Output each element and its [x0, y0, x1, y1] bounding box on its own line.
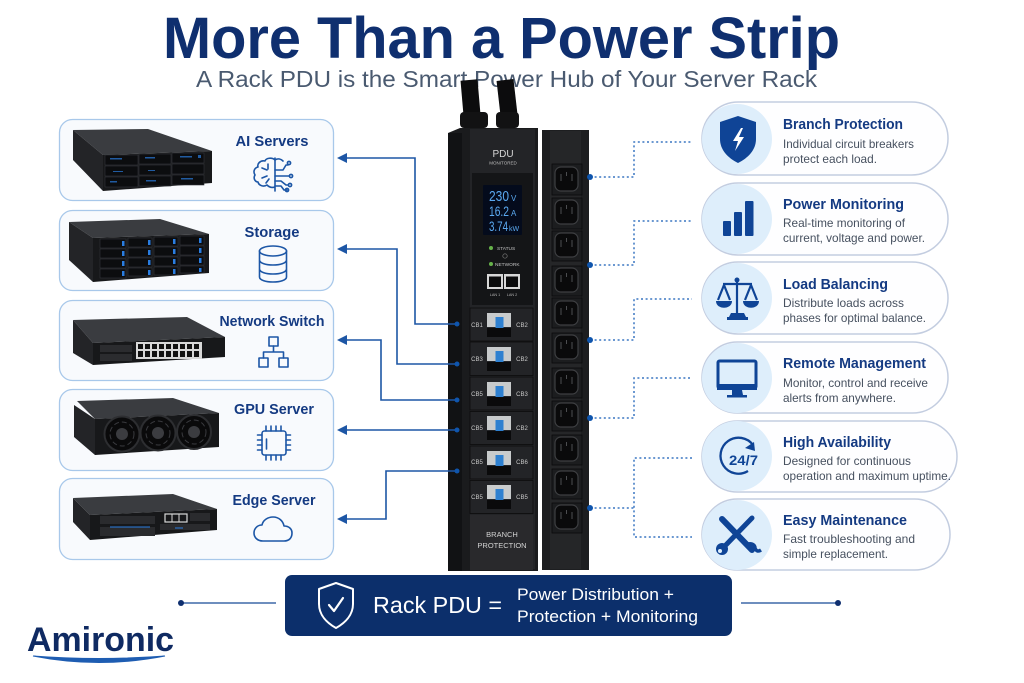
label: AI Servers: AI Servers [236, 133, 308, 150]
branch protection plate [470, 515, 533, 570]
panel: Easy Maintenance [702, 499, 950, 570]
icon: bar chart [723, 201, 754, 236]
label: Edge Server: Edge Server [232, 492, 316, 509]
text: Power Monitoring: Power Monitoring [783, 196, 904, 213]
breaker modules: CB3 [516, 392, 528, 398]
text: Load Balancing [783, 276, 926, 325]
breaker modules: CB5 [516, 495, 528, 501]
LCD display [483, 185, 522, 235]
text: Easy Maintenance: Easy Maintenance [783, 512, 907, 529]
icon: monitor [717, 361, 757, 398]
LCD display: 16.2 [489, 203, 509, 219]
panel: High Availability [702, 421, 957, 492]
banner line right [741, 600, 841, 606]
subtitle: A Rack PDU is the Smart Power Hub of Your Server Rack [196, 66, 818, 92]
text: Easy Maintenance: Fast troubleshooting and [783, 532, 915, 546]
breaker modules: CB2 [516, 323, 528, 329]
text: Power Monitoring: current, voltage and power. [783, 231, 925, 245]
text: High Availability: High Availability [783, 434, 892, 451]
panel: Edge Server [60, 478, 334, 560]
LCD display: V [511, 194, 517, 203]
panel: Storage [60, 210, 334, 290]
label: GPU Server: GPU Server [234, 401, 314, 418]
icon: shield check [319, 583, 353, 628]
text: Rack PDU =: Rack PDU = [373, 592, 502, 618]
text: Branch Protection: Individual circuit breakers [783, 137, 914, 151]
PDU label: PDU [492, 149, 514, 160]
text: equation terms: Protection + Monitoring [517, 608, 698, 626]
text: High Availability: operation and maximum uptime. [783, 469, 951, 483]
icon: chip [258, 426, 290, 460]
text: equation terms [517, 586, 698, 626]
banner: Rack PDU equation [285, 575, 732, 636]
LCD display: kW [509, 226, 520, 233]
text: Power Monitoring: Real-time monitoring of [783, 216, 906, 230]
title: More Than a Power Strip [163, 6, 840, 71]
text: Easy Maintenance [783, 512, 915, 561]
breaker modules: CB5 [471, 460, 483, 466]
logo: Amironic: Amironic [27, 621, 174, 659]
banner line left [178, 600, 276, 606]
breaker modules: CB5 [471, 392, 483, 398]
LAN ports [487, 274, 520, 297]
icon: 24/7 cycle [721, 438, 758, 474]
connector: Storage [337, 244, 460, 366]
dotted connector: High Availability and Easy Maintenance [587, 458, 692, 537]
server: storage chassis [69, 219, 209, 282]
text: Load Balancing: Load Balancing [783, 276, 888, 293]
panel: Branch Protection [702, 102, 948, 175]
icon: shield with bolt [720, 116, 756, 163]
breaker modules [470, 308, 533, 514]
PDU outlet strip [542, 130, 589, 570]
icon: database [260, 246, 286, 282]
LCD display: 230 [489, 189, 509, 205]
connector: Edge Server [337, 468, 460, 524]
server: AI server chassis [73, 129, 212, 191]
text: Load Balancing: Distribute loads across [783, 296, 904, 310]
icon: scales [716, 278, 759, 320]
breaker modules: CB1 [471, 323, 483, 329]
label: Storage: Storage [244, 224, 300, 241]
panel: Network Switch [60, 300, 334, 380]
text: Branch Protection: Branch Protection [783, 116, 903, 133]
dotted connector: Power Monitoring [587, 221, 692, 268]
text: Load Balancing: phases for optimal balance. [783, 311, 926, 325]
text: Branch Protection [783, 116, 914, 166]
icon: brain circuit [254, 158, 293, 192]
panel: AI Servers [60, 120, 334, 200]
server: edge chassis [73, 494, 217, 540]
text: High Availability [783, 434, 951, 483]
LAN ports: LAN 2 [507, 293, 517, 297]
icon: network tree [259, 337, 288, 367]
LCD display: 3.74 [489, 219, 508, 234]
panel: Load Balancing [702, 262, 948, 334]
text: Remote Management [783, 355, 928, 405]
LAN ports: LAN 1 [490, 293, 500, 297]
dotted connector: Load Balancing [587, 299, 692, 343]
dotted connector: Remote Management [587, 378, 692, 421]
text: Easy Maintenance: simple replacement. [783, 547, 888, 561]
connector: AI Servers [337, 153, 460, 326]
icon: 24/7 cycle: 24/7 [729, 453, 758, 468]
panel: Remote Management [702, 342, 948, 413]
PDU label [489, 149, 517, 166]
server: GPU chassis with fans [74, 398, 219, 455]
breaker modules: CB2 [516, 357, 528, 363]
icon: cloud [254, 517, 292, 541]
text: Branch Protection: protect each load. [783, 152, 877, 166]
text: Remote Management: Monitor, control and receive [783, 376, 928, 390]
PDU label: MONITORED [489, 160, 517, 166]
breaker modules: CB5 [471, 495, 483, 501]
power cables [460, 80, 519, 128]
PDU main body [448, 128, 538, 571]
server: network switch chassis [73, 317, 225, 365]
connector: GPU Server [337, 425, 460, 435]
status LEDs: NETWORK [495, 262, 520, 268]
text: High Availability: Designed for continuous [783, 454, 911, 468]
breaker modules: CB6 [516, 460, 528, 466]
branch protection plate: BRANCH [486, 530, 518, 539]
branch protection plate: PROTECTION [477, 541, 527, 550]
LCD display: A [511, 209, 517, 218]
status LEDs: STATUS [497, 246, 515, 252]
label: Network Switch: Network Switch [220, 313, 324, 330]
dotted connector: Branch Protection [587, 142, 692, 180]
breaker modules: CB2 [516, 426, 528, 432]
text: Remote Management: alerts from anywhere. [783, 391, 896, 405]
text: Power Monitoring [783, 196, 925, 245]
connector: Network Switch [337, 335, 460, 402]
text: Remote Management: Remote Management [783, 355, 926, 372]
text: equation terms: Power Distribution + [517, 586, 674, 604]
status LEDs [489, 246, 520, 268]
icon: tools [716, 518, 761, 555]
panel: GPU Server [60, 390, 334, 470]
panel: Power Monitoring [702, 183, 948, 255]
breaker modules: CB5 [471, 426, 483, 432]
breaker modules: CB3 [471, 357, 483, 363]
